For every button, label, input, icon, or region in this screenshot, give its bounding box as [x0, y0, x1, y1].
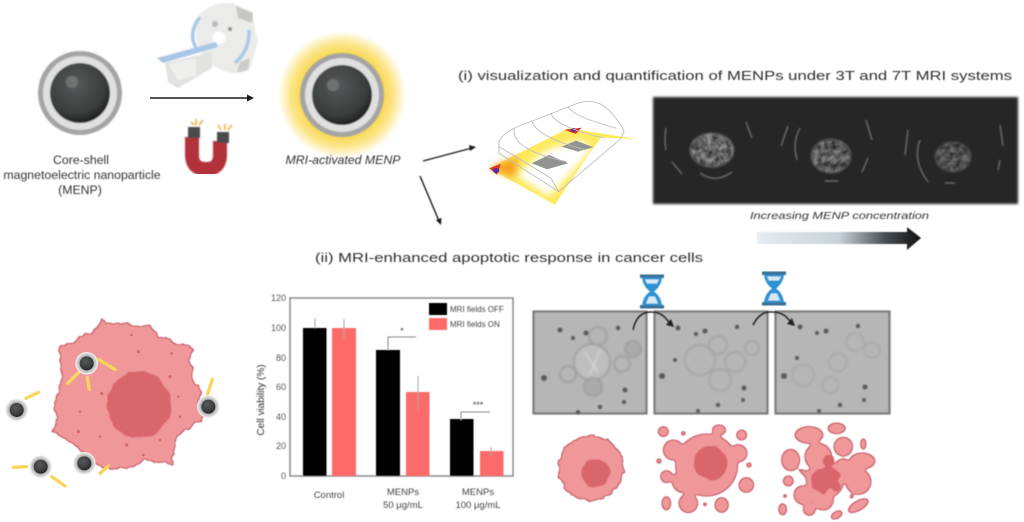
x axis labels: Control — [314, 490, 344, 501]
y axis title: Cell viability (%) — [256, 364, 267, 436]
yellow rays — [13, 359, 212, 486]
illustration: cancer cell with MENPs — [5, 317, 220, 486]
bars: 100 µg/mL — [450, 419, 504, 476]
arrow: concentration gradient — [757, 227, 921, 250]
cell body — [51, 317, 204, 470]
cell nucleus — [107, 372, 171, 438]
icon: hourglass 2 — [762, 272, 786, 306]
micrographs: time series — [534, 312, 890, 414]
legend: MRI fields OFF — [450, 305, 504, 314]
icon: MRI scanner — [157, 3, 258, 88]
axis numbers: 20 — [276, 441, 286, 451]
micrograph 2 — [654, 312, 768, 414]
axis numbers: 60 — [276, 382, 286, 392]
axis numbers: 120 — [271, 293, 286, 303]
heading: apoptotic response: (ii) MRI-enhanced apoptotic response in cancer cells — [315, 250, 704, 265]
arrow: to visualization — [423, 145, 476, 161]
legend: MRI fields ON — [450, 320, 500, 329]
arrow: activation — [150, 94, 254, 102]
arrow: to apoptotic response — [420, 176, 442, 225]
illustration: fragmented cell — [778, 422, 876, 522]
arrow: time step 1 — [633, 312, 674, 330]
bars: 50 µg/mL — [376, 350, 430, 476]
bar chart: cell viability — [256, 293, 513, 511]
label: core-shell MENP: magnetoelectric nanoparticle — [3, 168, 161, 182]
axis numbers: 100 — [271, 323, 286, 333]
plot frame — [290, 298, 513, 476]
label: MRI-activated MENP: MRI-activated MENP — [286, 153, 400, 167]
MENPs — [5, 352, 220, 478]
particle: core-shell MENP — [38, 51, 122, 135]
cytoplasm dots — [77, 334, 181, 456]
illustration: intact cancer cell — [558, 435, 624, 501]
x axis labels: MENPs — [462, 487, 494, 498]
arrow: time step 2 — [753, 312, 795, 326]
micrograph 3 — [776, 312, 890, 414]
bars: control — [303, 328, 356, 476]
error bars — [315, 318, 491, 456]
axis numbers: 0 — [281, 471, 286, 481]
significance marks: *** — [473, 400, 484, 410]
image panel: MRI phantom scans — [653, 97, 1018, 204]
micrograph 1 — [534, 312, 646, 414]
x axis labels: 100 μg/mL — [455, 500, 501, 511]
illustration: blebbing cell — [656, 424, 754, 513]
label: increasing MENP concentration: Increasing MENP concentration — [750, 210, 929, 222]
legend — [429, 303, 504, 330]
axis numbers: 40 — [276, 412, 286, 422]
icon: magnet — [188, 119, 232, 169]
x axis labels: 50 μg/mL — [383, 500, 423, 511]
x axis labels: MENPs — [387, 487, 419, 498]
significance marks: * — [400, 326, 404, 336]
particle: MRI-activated MENP — [278, 31, 406, 159]
label: core-shell MENP: Core-shell — [53, 153, 109, 167]
diagram: coil and field map — [489, 101, 638, 205]
label: core-shell MENP: (MENP) — [58, 183, 102, 197]
axis numbers: 80 — [276, 353, 286, 363]
icon: hourglass 1 — [640, 274, 664, 308]
heading: visualization and quantification: (i) visualization and quantification of MENPs under 3T and 7T MRI systems — [458, 68, 1013, 83]
